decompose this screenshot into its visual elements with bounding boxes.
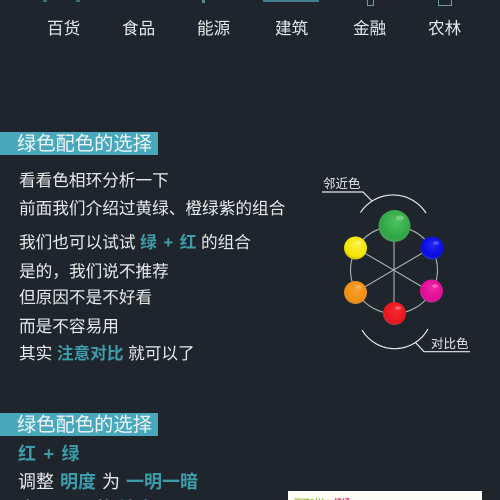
category labels: 农林 [428,19,461,38]
magenta ball [420,280,443,302]
callout: adjacent colors: 邻近色 [323,176,361,191]
heading: section 2: 绿色配色的选择 [17,415,152,436]
text block: explanation: 我们也可以试试 绿 + 红 的组合 [19,233,251,252]
yellow ball [344,236,367,260]
callout: contrast colors [362,329,470,352]
category labels: 能源 [197,19,230,38]
category labels: 食品 [122,19,155,38]
orange ball [344,281,367,304]
text block: explanation [19,233,251,363]
text block: explanation: 是的，我们说不推荐 [19,258,169,282]
category labels [47,19,461,38]
text block: explanation: 其实 注意对比 就可以了 [19,344,195,363]
example card [288,491,482,500]
blue ball [420,236,444,260]
callout: adjacent colors [322,176,426,213]
text block: intro: 前面我们介绍过黄绿、橙绿紫的组合 [19,199,285,218]
text block: intro [19,171,285,218]
green ball [378,210,410,242]
text block: red plus green: 调整 明度 为 一明一暗 [18,472,198,492]
text block: explanation: 而是不容易用 [19,317,119,336]
color wheel diagram [322,176,470,352]
text block: red plus green [18,444,198,500]
heading: section 1: 绿色配色的选择 [17,134,152,155]
text block: intro: 看看色相环分析一下 [19,171,169,190]
category labels: 百货 [47,19,80,38]
category labels: 金融 [353,19,386,38]
text block: red plus green: 红 + 绿 [18,444,80,464]
red ball [383,302,406,325]
top icon fragments [43,0,452,6]
text block: explanation: 但原因不是不好看 [19,288,152,307]
wheel ring and spokes [350,226,438,314]
category labels: 建筑 [275,19,308,38]
callout: contrast colors: 对比色 [431,336,469,351]
